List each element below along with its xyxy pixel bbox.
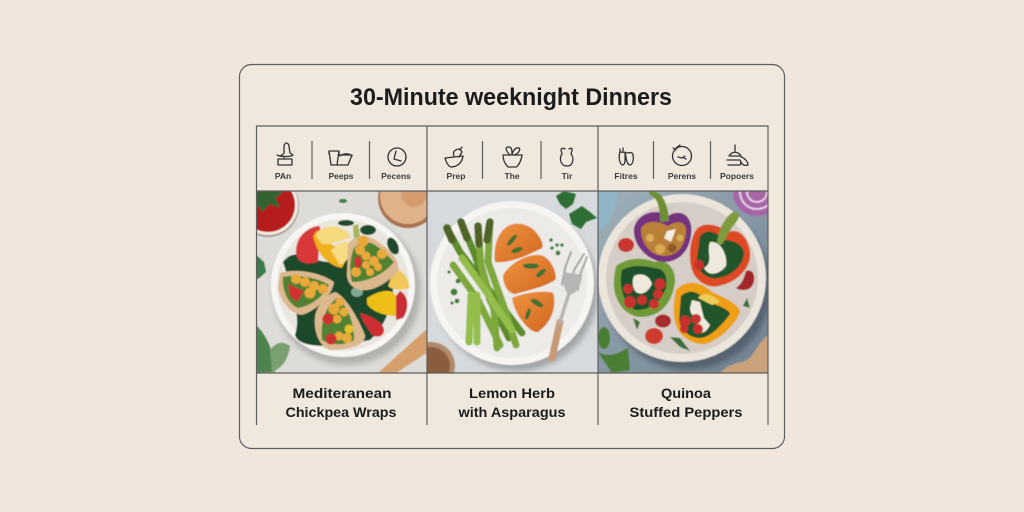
icon: tin (560, 148, 573, 166)
green pepper (614, 259, 675, 317)
label: Peeps: Peeps (328, 171, 354, 181)
caption: Mediterranean Chickpea Wraps: Mediteranean (292, 385, 392, 401)
card frame (240, 64, 784, 448)
fork (552, 252, 587, 358)
lemon and yellow pepper right (367, 268, 409, 320)
icon: fibres (619, 148, 633, 165)
tomato slices and herbs (598, 238, 754, 373)
caption: Quinoa Stuffed Peppers (630, 385, 743, 420)
purple pepper (634, 191, 691, 262)
herb flecks (447, 238, 564, 305)
plate (430, 201, 598, 371)
asparagus (447, 222, 522, 348)
blue napkin (598, 191, 617, 232)
panel: lemon herb salmon with asparagus photo (428, 192, 598, 372)
wrap: bottom (315, 292, 365, 350)
label: Pecens: Pecens (381, 171, 411, 181)
plate (598, 194, 771, 370)
parsley (556, 191, 597, 229)
wrap: top right (347, 236, 398, 290)
label: PAn: PAn (275, 171, 291, 181)
icon: clock (388, 148, 406, 166)
label: Tir: Tir (562, 171, 573, 181)
red pepper (690, 212, 750, 287)
wooden bowl corner (428, 341, 456, 372)
salmon pieces (494, 224, 556, 332)
wrap: left (278, 271, 334, 315)
sauce bowl (257, 192, 300, 238)
caption: Quinoa Stuffed Peppers: Stuffed Peppers (630, 404, 743, 420)
caption: Lemon Herb with Asparagus: Lemon Herb (469, 385, 555, 401)
red onion (732, 192, 768, 216)
label: Prep: Prep (447, 171, 465, 181)
panel: quinoa stuffed peppers photo (598, 192, 768, 372)
caption: Quinoa Stuffed Peppers: Quinoa (661, 385, 711, 401)
red pepper lower right (360, 313, 384, 337)
icon: face fruit (672, 145, 692, 166)
red pepper and lemon slices (296, 224, 360, 268)
yellow pepper (674, 283, 740, 344)
label: Perens: Perens (668, 171, 696, 181)
plate (271, 213, 421, 365)
icon: peeps (329, 151, 352, 165)
greens (283, 220, 401, 346)
caption: Lemon Herb with Asparagus (457, 385, 566, 420)
herb leaves (256, 199, 347, 373)
icon: pan (277, 143, 293, 165)
panel: Mediterranean chickpea wraps photo (257, 192, 426, 372)
icon: pepper stack (727, 145, 748, 165)
title: 30-Minute weeknight Dinners (350, 84, 672, 111)
icon: bowl with herbs (503, 147, 522, 167)
caption: Mediterranean Chickpea Wraps: Chickpea Wraps (286, 404, 397, 420)
label: Fitres: Fitres (614, 171, 638, 181)
caption: Lemon Herb with Asparagus: with Asparagus (457, 404, 566, 420)
caption: Mediterranean Chickpea Wraps (286, 385, 397, 420)
icon strip dividers (312, 141, 710, 179)
wooden board (377, 192, 426, 229)
label: The: The (504, 171, 520, 181)
wooden spoon (378, 328, 428, 373)
table frame (256, 126, 768, 425)
wooden board corner (720, 335, 768, 373)
label: Popoers: Popoers (720, 171, 754, 181)
icon: prep bowl (445, 147, 463, 167)
